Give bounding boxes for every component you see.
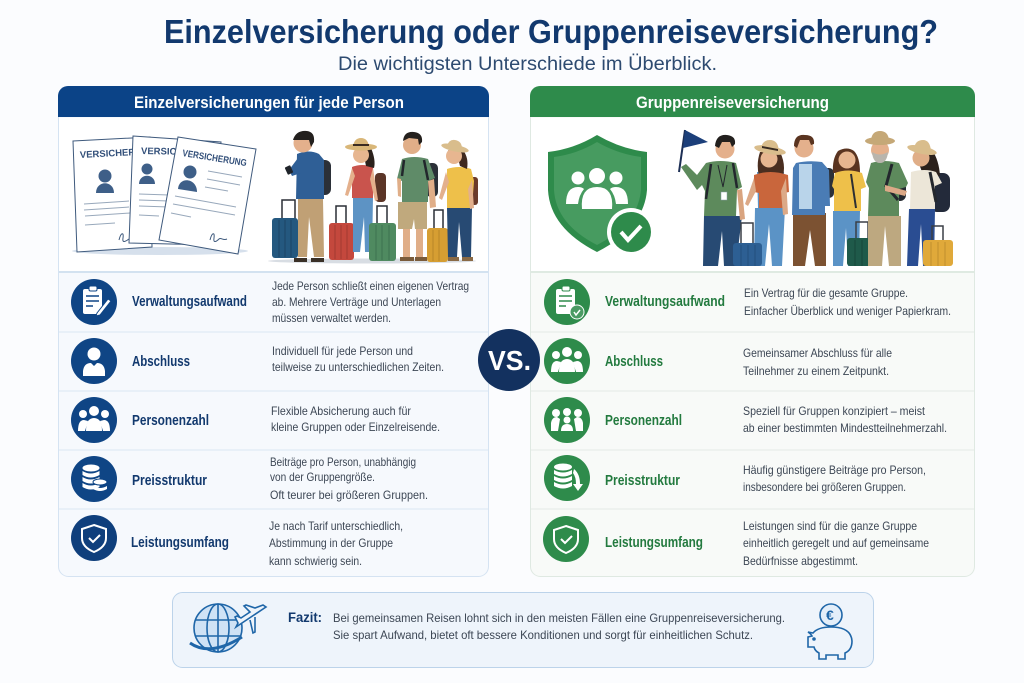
icon: three people [71, 397, 117, 443]
row: Personenzahl (Gruppe): ab einer bestimmten Mindestteilnehmerzahl. [743, 421, 947, 435]
row: Preisstruktur: Beiträge pro Person, unabhängig [270, 455, 416, 469]
row: Personenzahl (Gruppe): Personenzahl [605, 413, 682, 429]
row: Verwaltungsaufwand: Verwaltungsaufwand [132, 294, 247, 310]
row: Leistungsumfang (Gruppe): einheitlich geregelt und auf gemeinsame [743, 536, 929, 550]
row: Abschluss: teilweise zu unterschiedlichen Zeiten. [272, 360, 444, 374]
row: Preisstruktur (Gruppe): Häufig günstigere Beiträge pro Person, [743, 463, 926, 477]
conclusion text: Sie spart Aufwand, bietet oft bessere Konditionen und sorgt für einheitlichen Schutz. [333, 628, 753, 642]
row: Verwaltungsaufwand [59, 272, 488, 325]
row: Verwaltungsaufwand: Jede Person schließt einen eigenen Vertrag [272, 279, 469, 293]
title: Einzelversicherung oder Gruppenreiseversicherung? [164, 13, 938, 50]
row: Abschluss [59, 332, 488, 384]
row: Leistungsumfang (Gruppe): Bedürfnisse abgestimmt. [743, 554, 858, 568]
illustration: three insurance documents: VERSICH [141, 146, 184, 158]
row: Abschluss: Abschluss [132, 354, 190, 370]
icon: piggy bank with euro coin: € [826, 607, 834, 623]
row: Verwaltungsaufwand (Gruppe): Verwaltungsaufwand [605, 294, 725, 310]
row: Leistungsumfang: Je nach Tarif unterschiedlich, [269, 519, 403, 533]
yellow case [923, 226, 953, 266]
left panel header: Einzelversicherungen für jede Person [134, 94, 404, 112]
row: Verwaltungsaufwand: müssen verwaltet werden. [272, 311, 391, 325]
icon: coins [71, 456, 117, 502]
row: Personenzahl: kleine Gruppen oder Einzelreisende. [271, 420, 440, 434]
guide with flag [679, 130, 745, 266]
blue case [733, 223, 762, 266]
row: Leistungsumfang (Gruppe) [531, 509, 974, 568]
traveller 2 with hat [329, 138, 386, 260]
older traveller with hat and beard [865, 131, 908, 266]
guest 3 in yellow [832, 148, 866, 266]
panel: Gruppenreiseversicherung [530, 86, 975, 576]
row: Abschluss (Gruppe) [531, 332, 974, 384]
row: Personenzahl (Gruppe): Speziell für Gruppen konzipiert – meist [743, 404, 926, 418]
dark green case [847, 222, 877, 266]
illustration: three insurance documents [72, 136, 256, 255]
icon: group [544, 338, 590, 384]
row: Abschluss: Individuell für jede Person und [272, 344, 413, 358]
row: Preisstruktur: von der Gruppengröße. [270, 470, 375, 484]
illustration: three insurance documents: VERSICHERUNG [182, 148, 247, 169]
conclusion text: Bei gemeinsamen Reisen lohnt sich in den meisten Fällen eine Gruppenreiseversicherung. [333, 611, 785, 625]
row: Leistungsumfang [59, 509, 488, 568]
icon: person [71, 338, 117, 384]
guest 2 in denim jacket [792, 135, 834, 266]
traveller 3 [397, 132, 438, 261]
row: Personenzahl (Gruppe) [531, 391, 974, 443]
right panel header [530, 86, 975, 117]
illustration: travel group with flag [679, 130, 953, 266]
panel: Einzelversicherungen [58, 86, 489, 576]
row: Personenzahl: Personenzahl [132, 413, 209, 429]
illustration: three insurance documents: VERSICHERU [80, 147, 142, 161]
row: Preisstruktur: Preisstruktur [132, 473, 207, 489]
row: Leistungsumfang (Gruppe): Leistungen sind für die ganze Gruppe [743, 519, 917, 533]
guest 1 with hat [745, 140, 789, 266]
VS badge [478, 329, 540, 391]
row: Preisstruktur: Oft teurer bei größeren Gruppen. [270, 488, 428, 502]
row: Abschluss (Gruppe): Abschluss [605, 354, 663, 370]
row: Personenzahl: Flexible Absicherung auch für [271, 404, 411, 418]
row: Preisstruktur (Gruppe) [531, 450, 974, 501]
icon: clipboard check [544, 279, 590, 325]
row: Leistungsumfang: kann schwierig sein. [269, 554, 362, 568]
right illustration area [531, 118, 974, 271]
left panel header [58, 86, 489, 117]
subtitle: Die wichtigsten Unterschiede im Überblick. [338, 53, 717, 75]
row: Verwaltungsaufwand (Gruppe): Einfacher Überblick und weniger Papierkram. [744, 304, 951, 318]
row: Preisstruktur (Gruppe): Preisstruktur [605, 473, 680, 489]
illustration: individual travellers with luggage [268, 131, 478, 264]
green suitcase [369, 206, 396, 261]
icon: globe with airplane [190, 604, 266, 652]
row: Personenzahl [59, 391, 488, 443]
yellow suitcase [427, 210, 448, 262]
row: Preisstruktur (Gruppe): insbesondere bei größeren Gruppen. [743, 480, 906, 494]
icon: shield check green [543, 516, 589, 562]
row: Leistungsumfang: Leistungsumfang [131, 535, 229, 551]
icon: clipboard [71, 279, 117, 325]
traveller 1 with phone [272, 131, 331, 262]
row: Verwaltungsaufwand: ab. Mehrere Verträge und Unterlagen [272, 295, 441, 309]
row: Preisstruktur [59, 450, 488, 502]
icon: green shield with group and check [548, 135, 655, 256]
VS badge: VS. [488, 345, 531, 376]
row: Abschluss (Gruppe): Gemeinsamer Abschluss für alle [743, 346, 892, 360]
row: Leistungsumfang: Abstimmung in der Gruppe [269, 536, 393, 550]
traveller in white top [906, 140, 950, 266]
row: Verwaltungsaufwand (Gruppe): Ein Vertrag für die gesamte Gruppe. [744, 286, 908, 300]
callout: Fazit [172, 592, 874, 668]
conclusion text: Fazit: [288, 609, 322, 625]
left illustration area [59, 118, 488, 271]
icon: coins with down arrow [544, 455, 590, 501]
icon: piggy bank with euro coin [808, 604, 852, 659]
row: Leistungsumfang (Gruppe): Leistungsumfang [605, 535, 703, 551]
conclusion text [288, 609, 785, 642]
row: Verwaltungsaufwand (Gruppe) [531, 272, 974, 325]
traveller 4 with hat [439, 140, 478, 261]
icon: many people [544, 397, 590, 443]
icon: shield check [71, 515, 117, 561]
right panel header: Gruppenreiseversicherung [636, 94, 829, 112]
row: Abschluss (Gruppe): Teilnehmer zu einem Zeitpunkt. [743, 364, 889, 378]
